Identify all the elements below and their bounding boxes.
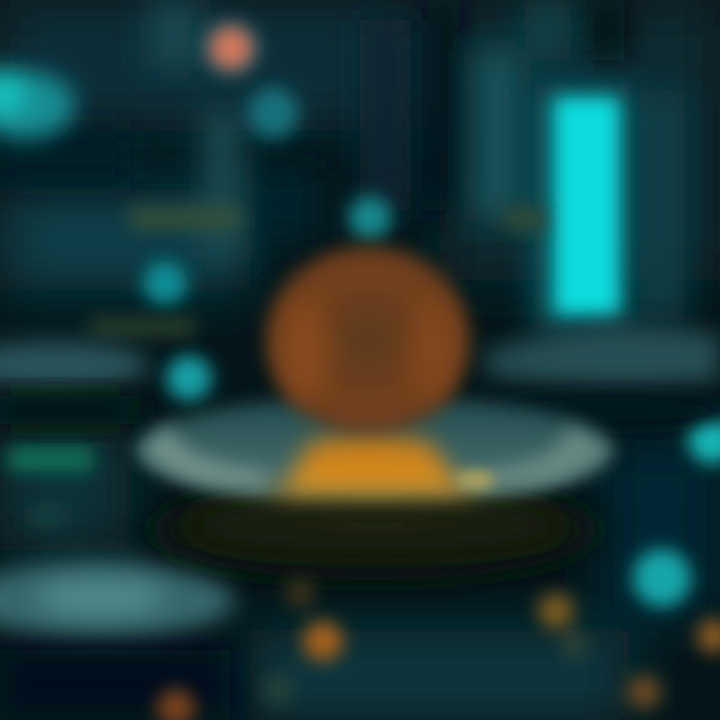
left side cyan cloud (0, 68, 75, 139)
faint olive labels (8, 207, 545, 525)
bronze coin (266, 246, 470, 434)
orange orb at top (203, 20, 259, 76)
glowing cyan column (535, 85, 630, 330)
lower left dish (0, 560, 235, 720)
small teal orbs (143, 87, 720, 607)
right platform (480, 326, 720, 428)
left platform (0, 341, 150, 425)
central bowl (137, 396, 613, 580)
background columns (0, 0, 685, 320)
floating amber sparks (157, 579, 720, 720)
glowing gold base (270, 432, 495, 494)
